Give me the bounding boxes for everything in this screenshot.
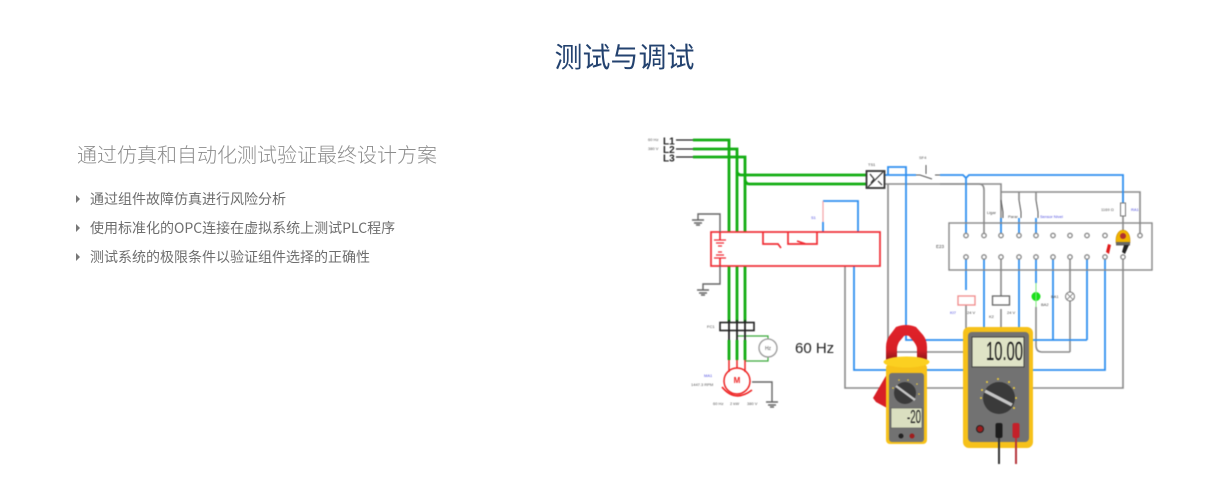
three-phase green power lines: [693, 140, 866, 360]
range marks: [892, 379, 920, 395]
line labels L1 L2 L3: L3: [663, 154, 675, 164]
contacts and switches: Sensor Nível: [1040, 214, 1063, 219]
red protection relay: [711, 232, 880, 266]
frequency meter connections: [737, 336, 768, 361]
motor: 380 V: [747, 401, 758, 406]
output loads: [950, 283, 1074, 319]
bullet 1: 通过组件故障仿真进行风险分析: [90, 189, 286, 209]
contacts and switches: [916, 155, 1063, 219]
body: [963, 327, 1033, 448]
body: [886, 364, 927, 444]
clamp meter: [873, 325, 930, 444]
bullet list: [76, 189, 395, 267]
transformer TS1: TS1: [868, 162, 876, 167]
bullet 3: 测试系统的极限条件以验证组件选择的正确性: [90, 247, 370, 267]
output loads: K2: [989, 314, 995, 319]
clamp jaw: [886, 325, 927, 360]
I/O module E23: [936, 223, 1152, 270]
output loads: 24 V: [1007, 310, 1016, 315]
black probe: [998, 426, 1000, 464]
range marks: [980, 378, 1017, 409]
I/O module E23: E23: [936, 244, 945, 249]
gray control wires: [845, 184, 1140, 388]
jacks: [976, 426, 984, 432]
clamp meter: -20: [907, 407, 921, 427]
frequency meter: Hz: [765, 346, 772, 352]
frequency meter: [759, 339, 777, 357]
contactor FC1: FC1: [707, 324, 715, 329]
motor: MA1: [704, 373, 713, 378]
resistor and ammeter probes: RA1: [1131, 207, 1140, 212]
circuit diagram: [648, 136, 1152, 407]
motor: [691, 360, 758, 406]
contacts and switches: Ligar: [987, 210, 997, 215]
S1 label: S1: [811, 215, 817, 220]
title: 测试与调试: [554, 36, 694, 76]
line labels L1 L2 L3: [648, 136, 693, 164]
transformer TS1: [866, 162, 884, 188]
contactor FC1: [707, 320, 754, 340]
red probe: [1015, 426, 1017, 464]
digital multimeter: [963, 327, 1033, 464]
output loads: 24 V: [967, 310, 976, 315]
display: [891, 408, 922, 428]
digital multimeter: 10.00: [986, 336, 1023, 366]
dial: [983, 382, 1015, 414]
line labels L1 L2 L3: 60 Hz: [648, 137, 658, 142]
jacks: [898, 434, 904, 438]
output loads: BA2: [1041, 302, 1049, 307]
output loads: KI7: [950, 310, 957, 315]
dial: [894, 382, 916, 404]
display: [972, 337, 1024, 367]
line labels L1 L2 L3: L1: [663, 136, 675, 148]
resistor and ammeter probes: 1169 Ω: [1101, 207, 1114, 212]
bullet 2: 使用标准化的OPC连接在虚拟系统上测试PLC程序: [90, 218, 395, 238]
60 Hz label: 60 Hz: [795, 340, 834, 357]
motor: 2 kW: [730, 401, 739, 406]
contacts and switches: SF4: [919, 155, 927, 160]
resistor and ammeter probes: [1101, 203, 1140, 254]
line labels L1 L2 L3: 380 V: [648, 146, 659, 151]
trigger: [873, 374, 887, 408]
motor: 1447.3 RPM: [691, 382, 713, 387]
motor: M: [734, 376, 741, 385]
line labels L1 L2 L3: L2: [663, 145, 675, 156]
contacts and switches: Parar: [1008, 214, 1018, 219]
subtitle: 通过仿真和自动化测试验证最终设计方案: [77, 139, 437, 168]
motor: 60 Hz: [713, 401, 723, 406]
blue control wires: [823, 167, 1123, 370]
ground connections: [692, 214, 778, 407]
output loads: BA1: [1051, 294, 1059, 299]
pink terminal wire: [822, 201, 824, 222]
